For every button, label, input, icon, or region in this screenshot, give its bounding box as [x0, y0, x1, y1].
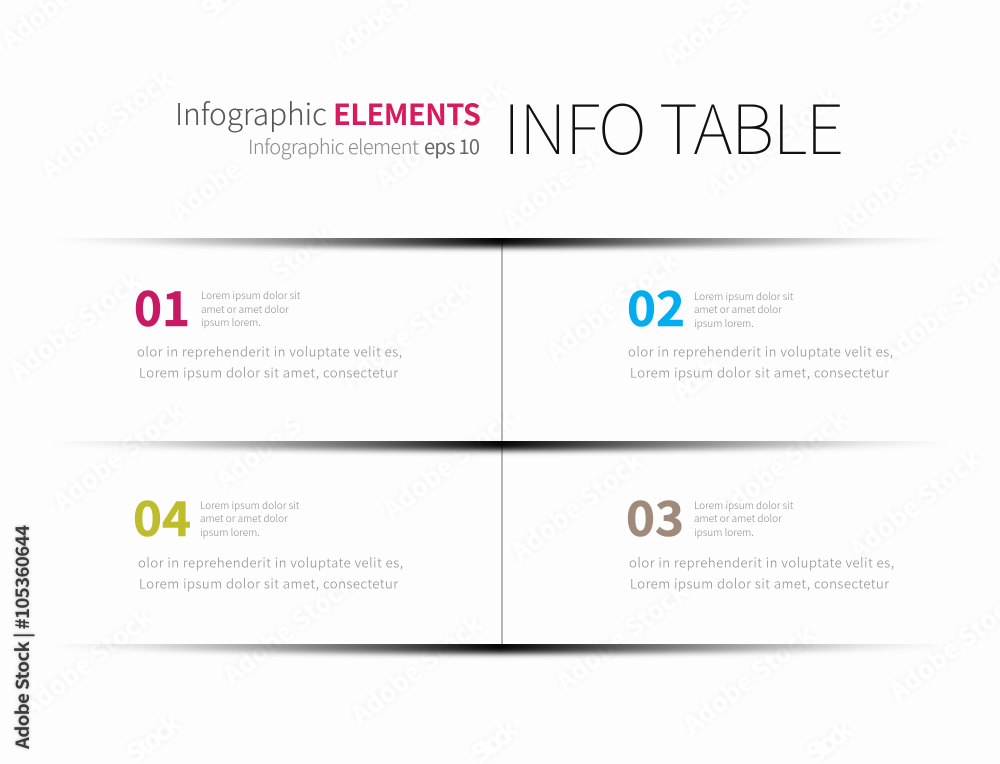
watermark pattern: Adobe	[162, 151, 248, 229]
watermark pattern: Adobe	[664, 343, 734, 409]
number 02: 02	[627, 270, 685, 340]
body text 01: Lorem ipsum dolor sit amet, consectetur	[139, 362, 398, 382]
stock id side label: Adobe Stock | #105360644	[9, 525, 35, 750]
shadow band: middle	[84, 441, 916, 456]
watermark pattern: Adobe Stock	[502, 443, 649, 569]
watermark pattern: Adobe St	[494, 137, 608, 237]
watermark pattern: Adobe Stock	[44, 393, 191, 519]
body text 02: Lorem ipsum dolor sit amet, consectetur	[630, 362, 889, 382]
panel: item 01	[134, 270, 402, 382]
watermark pattern: Adobe Stock	[840, 441, 987, 567]
watermark pattern: Adobe Stock	[537, 243, 684, 369]
short text 03: amet or amet dolor	[694, 510, 782, 525]
watermark pattern: Adobe S	[207, 406, 309, 497]
watermark pattern: Adobe Stock	[674, 616, 821, 742]
watermark pattern: Adobe Stock	[332, 271, 479, 397]
body text 04: olor in reprehenderit in voluptate velit es,	[138, 552, 403, 572]
number 01: 01	[134, 270, 190, 340]
watermark pattern: Adobe Stock	[367, 71, 514, 197]
short text 04: ipsum lorem.	[200, 524, 260, 539]
body text 04: Lorem ipsum dolor sit amet, consectetur	[139, 574, 398, 592]
watermark pattern: Adobe Stock	[342, 606, 489, 732]
body text 02: olor in reprehenderit in voluptate velit es,	[628, 342, 893, 360]
vertical divider	[502, 238, 503, 645]
short text 01: amet or amet dolor	[201, 301, 289, 316]
watermark pattern: Adobe Stock	[547, 573, 694, 699]
watermark pattern: Adobe Stock	[374, 401, 521, 527]
short text 04: amet or amet dolor	[200, 510, 288, 525]
heading: Infographic: Infographic	[175, 90, 327, 134]
watermark pattern: Adobe Stock	[0, 263, 147, 389]
short text 01: ipsum lorem.	[201, 314, 261, 329]
watermark pattern: Adobe Stock	[707, 401, 854, 527]
subheading accent: eps 10	[424, 131, 480, 160]
title: INFO TABLE	[503, 75, 844, 174]
short text 02: ipsum lorem.	[694, 315, 754, 330]
short text 03: ipsum lorem.	[694, 524, 754, 539]
short text 03: Lorem ipsum dolor sit	[694, 497, 794, 512]
short text 02: amet or amet dolor	[694, 301, 782, 316]
watermark pattern: Adobe Stock	[214, 566, 361, 692]
panel: item 03	[626, 480, 894, 592]
panel: item 02	[627, 270, 893, 382]
short text 02: Lorem ipsum dolor sit	[694, 288, 794, 303]
heading accent: ELEMENTS	[333, 92, 481, 134]
watermark pattern: Adobe Stock	[827, 117, 974, 243]
body text 03: Lorem ipsum dolor sit amet, consectetur	[630, 574, 889, 592]
watermark pattern: Adobe Stock	[698, 79, 845, 205]
shadow band: bottom	[84, 644, 916, 658]
heading block	[175, 90, 481, 160]
shadow band: top	[84, 238, 916, 252]
short text 04: Lorem ipsum dolor sit	[200, 497, 300, 512]
short text 01: Lorem ipsum dolor sit	[201, 287, 301, 302]
watermark pattern: Adobe Stock	[12, 599, 159, 725]
number 04: 04	[133, 480, 191, 550]
watermark pattern: Stock	[263, 217, 340, 288]
body text 01: olor in reprehenderit in voluptate velit es,	[137, 342, 402, 360]
body text 03: olor in reprehenderit in voluptate velit es,	[629, 552, 894, 572]
watermark pattern: Adobe Stock	[32, 61, 179, 187]
subheading: Infographic element	[248, 131, 419, 160]
panel: item 04	[133, 480, 403, 592]
number 03: 03	[626, 480, 684, 550]
